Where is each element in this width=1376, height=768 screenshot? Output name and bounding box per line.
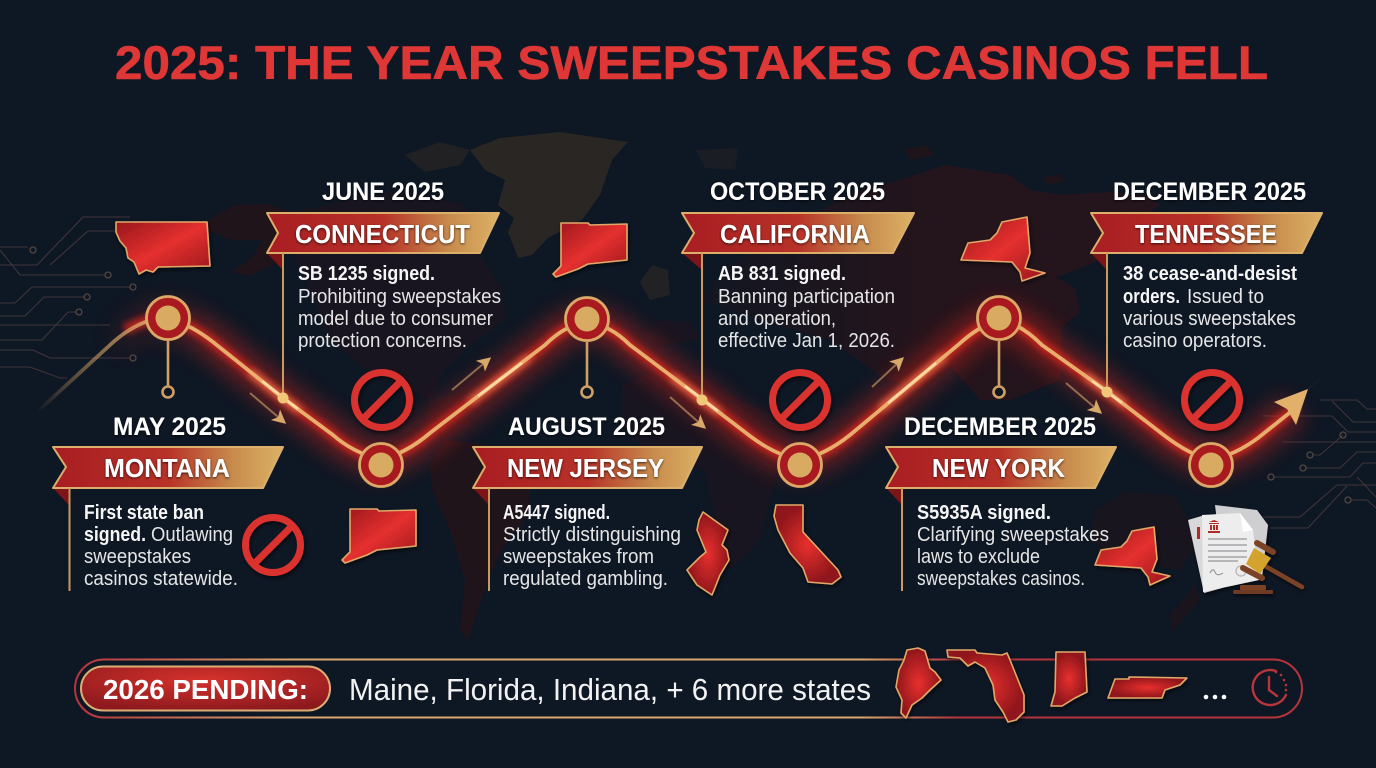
banner: Montana: [53, 447, 283, 505]
text: Montana description: signed.: [84, 523, 146, 546]
text: New Jersey description: sweepstakes from: [503, 545, 654, 568]
banner: New Jersey: NEW JERSEY: [507, 453, 664, 483]
banner: New York: NEW YORK: [932, 453, 1065, 483]
banner: California: [682, 213, 914, 270]
text: New Jersey description: A5447 signed.: [503, 501, 610, 524]
text: Connecticut description: Prohibiting sweepstakes: [298, 285, 501, 308]
date: December 2025 Tennessee: DECEMBER 2025: [1113, 178, 1306, 206]
ellipsis: [1204, 695, 1226, 699]
panel: December 2025 Tennessee: [1091, 178, 1322, 428]
world map backdrop: [198, 132, 1200, 640]
text: Connecticut description: protection concerns.: [298, 329, 467, 352]
panel: October 2025 California: [682, 178, 914, 428]
text: New York description: sweepstakes casinos.: [917, 567, 1085, 590]
text: Montana description: sweepstakes: [84, 545, 191, 568]
panel: 2026 pending bar: [75, 648, 1302, 722]
text: Tennessee description: [1123, 262, 1297, 352]
text: New Jersey description: [503, 501, 681, 590]
text: New York description: laws to exclude: [917, 545, 1040, 568]
text: New York description: S5935A signed.: [917, 501, 1051, 524]
panel: May 2025 Montana: [53, 413, 300, 591]
banner: New York: [886, 447, 1116, 505]
banner: New Jersey: [473, 447, 702, 505]
state: New York lower: [1095, 527, 1170, 585]
banner: Tennessee: TENNESSEE: [1135, 219, 1277, 249]
state: Indiana: [1051, 652, 1087, 706]
text: New Jersey description: Strictly distinguishing: [503, 523, 681, 546]
banner: California: CALIFORNIA: [720, 219, 870, 249]
date: August 2025: AUGUST 2025: [508, 413, 665, 441]
text: Montana description: Outlawing: [151, 523, 233, 546]
text: Connecticut description: model due to consumer: [298, 307, 493, 330]
icon: prohibition California: [772, 372, 828, 428]
state: Tennessee: [1108, 677, 1187, 698]
text: Montana description: First state ban: [84, 501, 204, 524]
icon: prohibition Montana: [246, 518, 300, 572]
text: Montana description: casinos statewide.: [84, 567, 238, 590]
icon: legal document and gavel: [1188, 505, 1302, 594]
pending states text: Maine, Florida, Indiana, + 6 more states: [349, 672, 871, 707]
date: December 2025 New York: DECEMBER 2025: [904, 413, 1096, 441]
circuit lines left: [0, 217, 136, 378]
text: Tennessee description: orders.: [1123, 285, 1180, 308]
panel: August 2025 New Jersey: [473, 413, 729, 595]
banner: Connecticut: [267, 213, 499, 270]
text: Connecticut description: SB 1235 signed.: [298, 262, 435, 285]
pending pill: [81, 666, 330, 710]
title: 2025: THE YEAR SWEEPSTAKES CASINOS FELL: [115, 36, 1268, 89]
text: California description: AB 831 signed.: [718, 262, 846, 285]
small direction arrows: [250, 359, 1100, 427]
state: Montana: [116, 222, 210, 274]
panel: June 2025 Connecticut: [267, 178, 501, 428]
date: October 2025: OCTOBER 2025: [710, 178, 885, 206]
icon: prohibition Connecticut: [354, 372, 410, 428]
circuit lines right: [1263, 400, 1376, 528]
state: New Jersey: [687, 512, 729, 595]
text: New York description: Clarifying sweepstakes: [917, 523, 1109, 546]
text: California description: effective Jan 1, 2026.: [718, 329, 895, 352]
state: Connecticut lower: [342, 509, 416, 563]
text: California description: Banning participation: [718, 285, 895, 308]
text: Connecticut description: [298, 262, 501, 352]
bright line highlights: [250, 356, 1125, 413]
icon: clock: [1253, 670, 1287, 705]
date: June 2025: JUNE 2025: [322, 178, 444, 206]
banner: Tennessee: [1091, 213, 1322, 270]
state: Maine: [896, 648, 941, 718]
text: Tennessee description: 38 cease-and-desist: [1123, 262, 1297, 285]
timeline line with arrow: [37, 318, 1342, 460]
state: New York upper: [961, 217, 1045, 281]
state: California: [774, 505, 841, 584]
panel: December 2025 New York: [886, 413, 1170, 591]
icon: prohibition Tennessee: [1184, 372, 1240, 428]
text: California description: and operation,: [718, 307, 836, 330]
text: California description: [718, 262, 895, 352]
text: Tennessee description: various sweepstakes: [1123, 307, 1296, 330]
milestone nodes: [146, 296, 1232, 486]
text: New York description: [917, 501, 1109, 590]
text: Tennessee description: casino operators.: [1123, 329, 1267, 352]
text: Montana description: [84, 501, 238, 590]
text: New Jersey description: regulated gambling.: [503, 567, 668, 590]
banner: Montana: MONTANA: [104, 453, 230, 483]
state: Connecticut upper: [553, 223, 627, 277]
pending pill: 2026 PENDING:: [103, 674, 308, 705]
date: May 2025: MAY 2025: [113, 413, 226, 441]
text: Tennessee description: Issued to: [1187, 285, 1264, 308]
banner: Connecticut: CONNECTICUT: [295, 219, 470, 249]
state: Florida: [947, 650, 1024, 722]
